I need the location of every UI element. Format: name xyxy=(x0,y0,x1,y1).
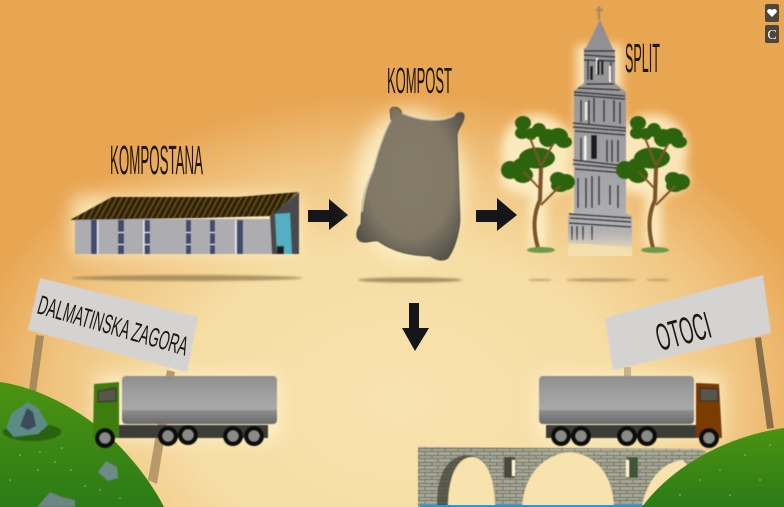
sign: dalmatinska zagora xyxy=(28,278,198,372)
truck: brown xyxy=(539,376,722,448)
panel: otoci xyxy=(420,275,784,507)
icon: compost bag xyxy=(357,107,464,260)
hill dots xyxy=(9,447,121,499)
shadow: bag xyxy=(358,277,462,283)
shadow: building xyxy=(72,275,302,281)
sign post xyxy=(755,337,774,429)
building glow xyxy=(72,196,300,254)
bridge xyxy=(418,447,712,507)
sign text: DALMATINSKA ZAGORA xyxy=(34,290,192,361)
buttons xyxy=(765,4,779,43)
panel: split xyxy=(499,6,690,282)
icon: left tree xyxy=(501,116,575,253)
icon: right tree xyxy=(616,116,690,253)
scene glow xyxy=(499,45,690,248)
icon: composting building xyxy=(70,192,299,254)
truck glow xyxy=(538,375,723,440)
panel: dalmatinska zagora xyxy=(0,278,280,507)
panel: split: SPLIT xyxy=(625,35,660,81)
hill: right xyxy=(642,428,784,507)
text: KOMPOST xyxy=(387,60,452,101)
icon: copyright button: C xyxy=(767,28,777,43)
shadows: split xyxy=(528,278,670,282)
truck: green xyxy=(93,376,277,448)
sign stub xyxy=(624,367,631,377)
sign post back xyxy=(29,335,44,392)
rocks xyxy=(3,402,118,507)
arrow: kompostana to kompost xyxy=(308,199,348,230)
cross xyxy=(596,6,603,20)
bottom blue bar xyxy=(420,505,660,507)
sign text: OTOCI xyxy=(651,305,715,360)
arrow: kompost down xyxy=(402,303,429,351)
icon: bell tower xyxy=(568,6,632,256)
truck glow xyxy=(95,375,280,440)
hill dots xyxy=(679,444,771,496)
hill: left xyxy=(0,382,164,507)
sign: otoci xyxy=(605,275,771,370)
sign post front xyxy=(148,370,175,484)
panel: kompostana: KOMPOSTANA xyxy=(110,137,203,183)
arrow: kompost to split xyxy=(476,198,517,231)
panel: kompost xyxy=(354,60,466,283)
icon: heart button xyxy=(765,4,779,22)
bag glow xyxy=(354,109,466,261)
panel: kompostana xyxy=(70,137,302,281)
